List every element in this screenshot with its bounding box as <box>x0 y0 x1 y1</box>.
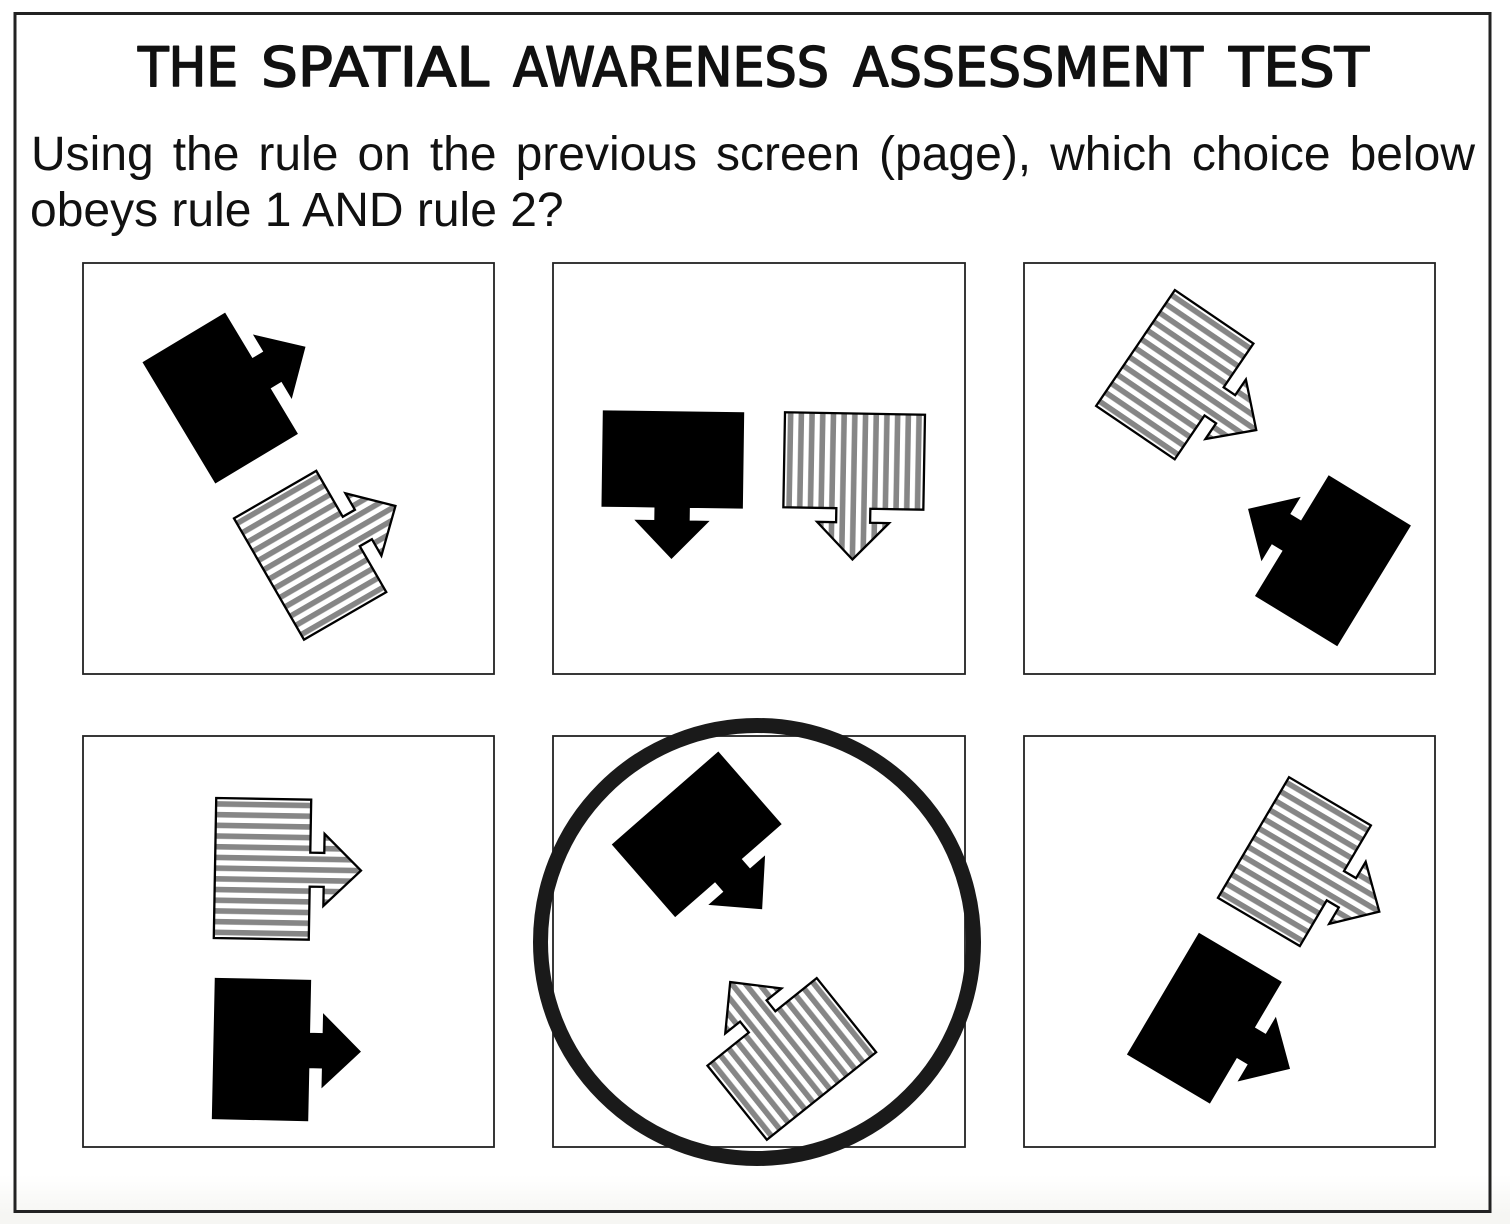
panel: choice 2 <box>553 263 965 674</box>
question text: Using the rule on the previous screen (page), which choice below <box>31 128 1475 181</box>
question text <box>30 128 1476 237</box>
answer circle <box>540 726 974 1158</box>
arrow: striped, down-right <box>1218 777 1415 972</box>
panel: choice 4 <box>83 736 494 1147</box>
question text: obeys rule 1 AND rule 2? <box>30 184 564 237</box>
arrow: black, down-right <box>613 752 814 955</box>
panel: choice 1 <box>83 263 494 674</box>
arrow: striped, right <box>214 798 362 941</box>
panel: choice 5 <box>553 736 965 1147</box>
title: SPATIAL <box>261 36 489 99</box>
title: TEST <box>1228 36 1370 99</box>
title <box>137 36 1370 99</box>
title: AWARENESS <box>513 36 829 99</box>
arrow: black, up-left <box>1212 450 1410 645</box>
arrow: black, down <box>601 411 743 559</box>
arrow: black, up-right <box>143 287 341 483</box>
panel: choice 6 <box>1024 736 1435 1147</box>
arrow: striped, down <box>782 412 925 561</box>
arrow: black, right <box>213 979 361 1122</box>
title: THE <box>137 36 238 99</box>
title: ASSESSMENT <box>853 36 1204 99</box>
arrow: striped, up-left <box>676 938 876 1140</box>
arrow: striped, up-right <box>234 445 430 640</box>
panel: choice 3 <box>1024 263 1435 674</box>
arrow: striped, down-right <box>1096 290 1296 488</box>
arrow: black, down-right <box>1128 934 1325 1129</box>
